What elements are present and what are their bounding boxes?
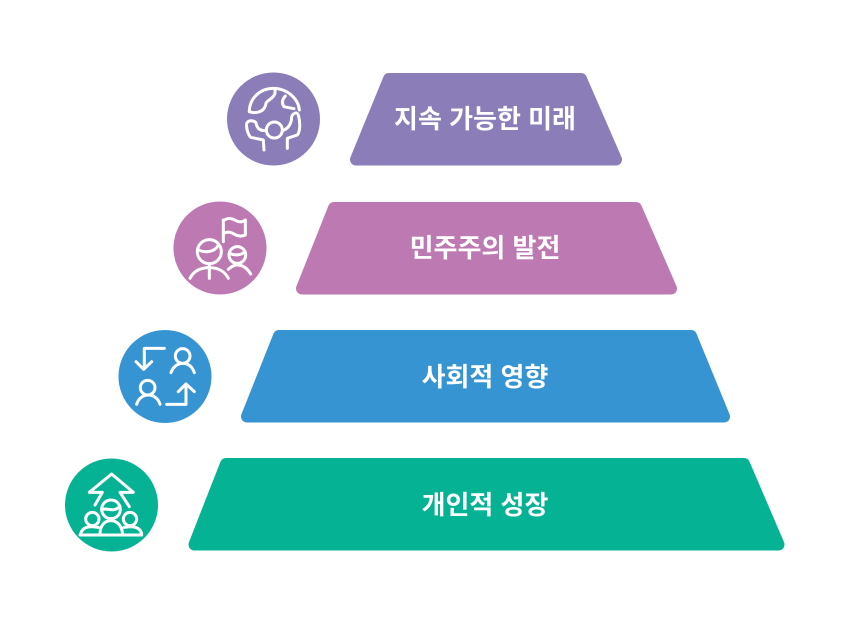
trapezoid: personal growth	[194, 464, 778, 544]
icon: person holding globe	[227, 72, 320, 166]
label: democratic development: 민주주의 발전	[410, 233, 560, 263]
label: social impact: 사회적 영향	[422, 362, 548, 392]
tier 1: personal growth	[65, 458, 778, 552]
trapezoid: democratic development	[302, 208, 671, 288]
tier 3: democratic development	[174, 202, 671, 294]
label: personal growth: 개인적 성장	[422, 490, 548, 520]
trapezoid: sustainable future	[356, 79, 616, 160]
label: sustainable future: 지속 가능한 미래	[394, 104, 576, 134]
trapezoid: social impact	[247, 336, 724, 416]
icon: people with flag	[174, 202, 266, 294]
icon: people exchange arrows	[118, 330, 212, 423]
tier 4: sustainable future	[227, 72, 616, 166]
tier 2: social impact	[118, 330, 724, 423]
icon: group with up arrow	[65, 458, 158, 552]
